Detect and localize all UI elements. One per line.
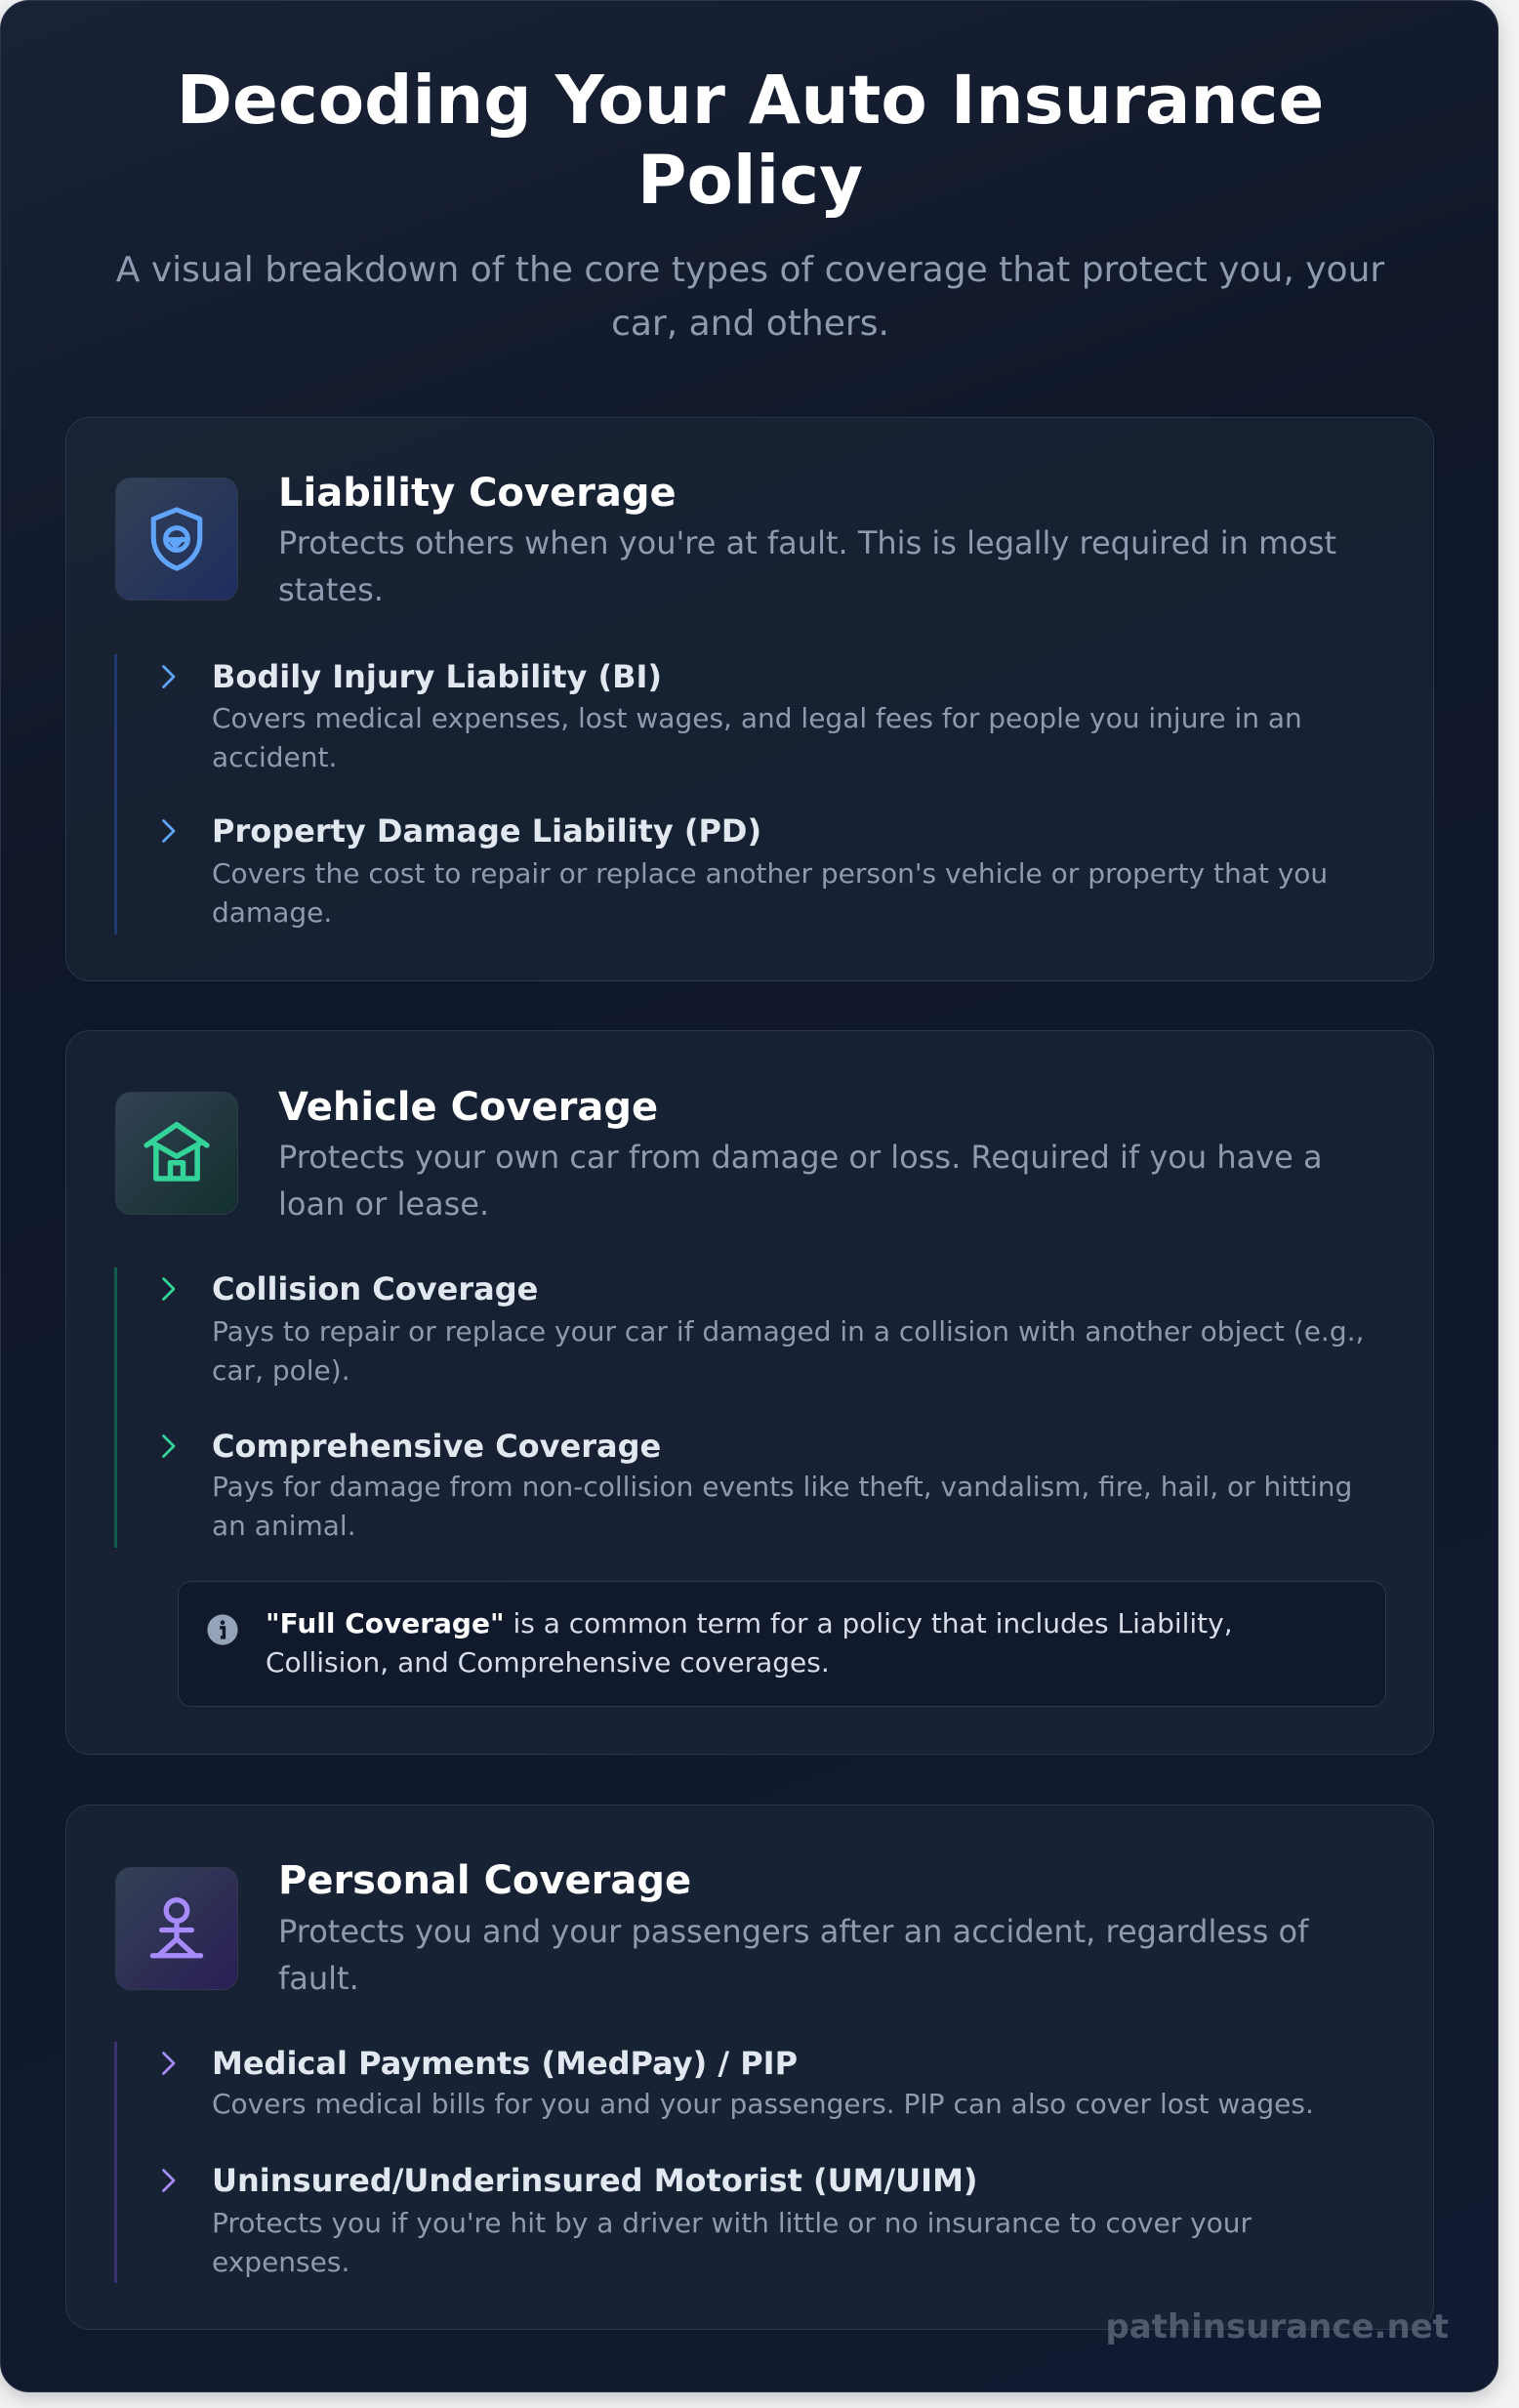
description: Protects your own car from damage or loss. Required if you have a bbox=[278, 1139, 1323, 1176]
item desc bbox=[212, 1315, 1364, 1387]
item: medpay: Medical Payments (MedPay) / PIP bbox=[212, 2045, 798, 2082]
title bbox=[177, 62, 1324, 220]
item: property damage: Property Damage Liability (PD) bbox=[212, 812, 761, 850]
callout text bbox=[266, 1607, 1233, 1679]
icon: person bbox=[115, 1867, 238, 1990]
description bbox=[278, 524, 1336, 608]
accent line bbox=[114, 2042, 117, 2283]
item desc: damage. bbox=[212, 896, 332, 929]
description: Protects others when you're at fault. This is legally required in most bbox=[278, 524, 1336, 561]
item desc: Pays for damage from non-collision events like theft, vandalism, fire, hail, or hitting bbox=[212, 1471, 1352, 1503]
item desc bbox=[212, 2207, 1252, 2278]
panel: vehicle coverage bbox=[65, 1030, 1434, 1755]
chevron bbox=[162, 665, 176, 688]
item desc: expenses. bbox=[212, 2246, 349, 2278]
item desc: an animal. bbox=[212, 1510, 356, 1542]
chevron bbox=[162, 1434, 176, 1458]
item desc bbox=[212, 1471, 1352, 1542]
chevron bbox=[162, 2169, 176, 2192]
item: comprehensive: Comprehensive Coverage bbox=[212, 1428, 661, 1465]
callout text: "Full Coverage" is a common term for a policy that includes Liability, bbox=[266, 1607, 1233, 1640]
item: bodily injury: Bodily Injury Liability (BI) bbox=[212, 658, 662, 695]
heading: Liability Coverage bbox=[278, 471, 677, 516]
chevron bbox=[162, 1277, 176, 1301]
accent line bbox=[114, 1267, 117, 1548]
item desc: accident. bbox=[212, 741, 337, 773]
item desc: Covers the cost to repair or replace another person's vehicle or property that you bbox=[212, 857, 1328, 890]
subtitle bbox=[116, 250, 1384, 344]
callout: full coverage bbox=[178, 1581, 1386, 1707]
subtitle: car, and others. bbox=[611, 304, 889, 344]
panel: personal coverage bbox=[65, 1805, 1434, 2330]
callout text: Collision, and Comprehensive coverages. bbox=[266, 1646, 830, 1679]
item: collision: Collision Coverage bbox=[212, 1270, 538, 1308]
icon: house bbox=[115, 1092, 238, 1215]
title: Policy bbox=[637, 142, 863, 220]
item desc: Covers medical bills for you and your passengers. PIP can also cover lost wages. bbox=[212, 2088, 1314, 2120]
description: loan or lease. bbox=[278, 1185, 489, 1223]
chevron bbox=[162, 819, 176, 843]
subtitle: A visual breakdown of the core types of coverage that protect you, your bbox=[116, 250, 1384, 290]
description: fault. bbox=[278, 1960, 359, 1997]
title: Decoding Your Auto Insurance bbox=[177, 62, 1324, 140]
description: states. bbox=[278, 571, 384, 608]
heading: Personal Coverage bbox=[278, 1858, 691, 1903]
item desc bbox=[212, 857, 1328, 929]
description bbox=[278, 1913, 1309, 1997]
item desc bbox=[212, 702, 1302, 773]
icon: shield bbox=[115, 477, 238, 601]
item desc: Covers medical expenses, lost wages, and legal fees for people you injure in an bbox=[212, 702, 1302, 734]
item: uninsured: Uninsured/Underinsured Motorist (UM/UIM) bbox=[212, 2162, 978, 2199]
item desc: Protects you if you're hit by a driver with little or no insurance to cover your bbox=[212, 2207, 1252, 2239]
watermark: pathinsurance.net bbox=[1105, 2307, 1449, 2346]
accent line bbox=[114, 654, 117, 934]
heading: Vehicle Coverage bbox=[278, 1085, 658, 1130]
description bbox=[278, 1139, 1323, 1223]
icon: info bbox=[207, 1614, 238, 1645]
chevron bbox=[162, 2052, 176, 2075]
item desc: car, pole). bbox=[212, 1354, 350, 1387]
panel: liability coverage bbox=[65, 417, 1434, 981]
description: Protects you and your passengers after an accident, regardless of bbox=[278, 1913, 1308, 1950]
item desc: Pays to repair or replace your car if damaged in a collision with another object (e.g., bbox=[212, 1315, 1364, 1348]
